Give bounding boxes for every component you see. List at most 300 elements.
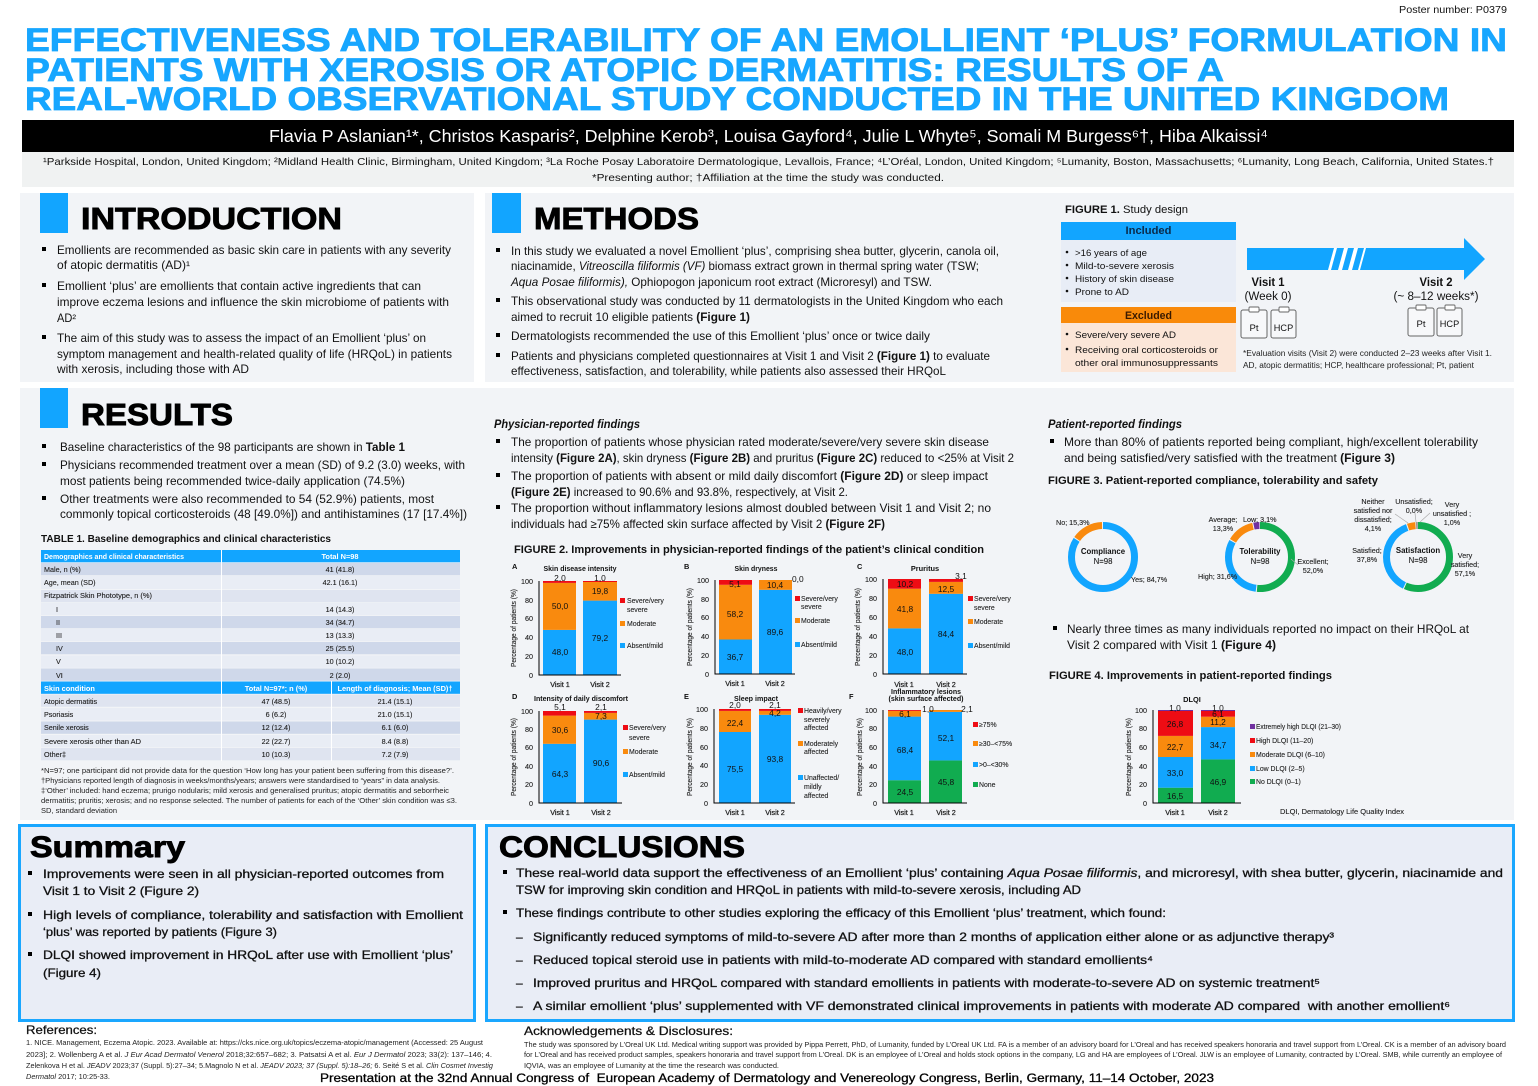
chart F: inflammatory lesions: 24,5 — [897, 787, 913, 797]
chart E: sleep impact: 2,1 — [769, 700, 781, 710]
chart F: inflammatory lesions: 40 — [869, 762, 877, 771]
icon: clipboard clinician visit 1 — [1271, 307, 1296, 338]
chart A: skin disease intensity: 20 — [525, 652, 533, 661]
icon: clipboard patient visit 1: Pt — [1249, 323, 1259, 334]
icon: clipboard patient visit 2: Pt — [1416, 319, 1426, 330]
title: REAL-WORLD OBSERVATIONAL STUDY CONDUCTED IN THE UNITED KINGDOM — [25, 81, 1449, 117]
donut: satisfaction: Very — [1458, 551, 1473, 560]
text block: conclusions bullets: Improved pruritus and HRQoL compared with standard emollients in patients with moderate-to-severe AD on systemic treatment⁵ — [533, 976, 1320, 990]
chart D: intensity of daily discomfort: Visit 2 — [591, 808, 611, 817]
chart A: skin disease intensity: Severe/very — [627, 598, 664, 605]
donut: tolerability: N=98 — [1251, 557, 1269, 566]
table 1: baseline demographics: 21.0 (15.1) — [378, 710, 412, 719]
text block: introduction bullets: improve eczema lesions and influence the skin microbiome of patients with — [57, 296, 449, 309]
table 1: baseline demographics: 25 (25.5) — [326, 644, 354, 653]
donut: satisfaction: Unsatisfied; — [1395, 497, 1433, 506]
panel: summary — [20, 826, 474, 1020]
table 1: baseline demographics: Severe xerosis other than AD — [44, 737, 141, 746]
chart: DLQI: 33,0 — [1167, 768, 1183, 778]
chart: DLQI: 20 — [1139, 780, 1147, 789]
text block: HRQoL bullet — [1053, 623, 1470, 652]
table 1: baseline demographics: Skin condition — [44, 684, 95, 693]
chart C: pruritus: Moderate — [974, 619, 1003, 626]
donut: tolerability: Average; — [1209, 515, 1237, 524]
donut: satisfaction: satisfied nor — [1354, 506, 1393, 515]
references: References: — [26, 1024, 97, 1037]
arrow: timeline — [1247, 238, 1485, 280]
table 1: baseline demographics: Age, mean (SD) — [44, 578, 96, 587]
table 1: baseline demographics: 12 (12.4) — [262, 723, 290, 732]
chart A: skin disease intensity — [509, 562, 664, 689]
chart A: skin disease intensity: A — [512, 562, 518, 571]
donut: satisfaction: 57,1% — [1455, 569, 1476, 578]
presentation line: Presentation at the 32nd Annual Congress of European Academy of Dermatology and Venereology Congress, Berlin, Germany, 11–14 October, 2023 — [320, 1071, 1214, 1085]
text block: physician-reported bullets: The proportion of patients with absent or mild daily discomfort (Figure 2D) or sleep impact — [511, 470, 989, 483]
chart A: skin disease intensity: Percentage of patients (%) — [509, 589, 518, 667]
visit 2 label: (~ 8–12 weeks*) — [1394, 291, 1479, 303]
excluded criteria box: Receiving oral corticosteroids or — [1075, 344, 1218, 355]
text block: HRQoL bullet: Visit 2 compared with Visit 1 (Figure 4) — [1067, 639, 1276, 652]
text block: baseline bullets — [42, 441, 467, 521]
chart E: sleep impact: E — [684, 692, 689, 701]
donut: tolerability — [1198, 515, 1329, 588]
text block: physician-reported bullets: The proportion without inflammatory lesions almost doubled between Visit 1 and Visit 2; no — [511, 502, 991, 515]
table 1: baseline demographics: 22 (22.7) — [262, 737, 290, 746]
table 1 footnote: SD, standard deviation — [41, 806, 117, 815]
table 1 footnote: dermatitis; pruritis; xerosis; and no response selected. The number of patients for each of the ‘Other’ skin condition was ≤3. — [41, 796, 457, 805]
chart B: skin dryness: Severe/very — [801, 596, 838, 603]
heading: patient-reported findings: Patient-reported findings — [1048, 418, 1183, 431]
chart C: pruritus: 84,4 — [938, 629, 954, 639]
chart C: pruritus: 60 — [869, 613, 877, 622]
acknowledgements and disclosures — [524, 1025, 1506, 1070]
text block: methods bullets — [496, 245, 1003, 378]
chart A: skin disease intensity: 48,0 — [552, 647, 568, 657]
text block: HRQoL bullet: Nearly three times as many individuals reported no impact on their HRQoL at — [1067, 623, 1470, 636]
chart F: inflammatory lesions: Inflammatory lesions — [891, 687, 961, 696]
affiliations: ¹Parkside Hospital, London, United Kingdom; ²Midland Health Clinic, Birmingham, United Kingdom; ³La Roche Posay Laboratoire Dermatologique, Levallois, France; ⁴L’Oréal, London, United Kingdom; ⁵Lumanity, Boston, Massachusetts; ⁶Lumanity, Long Beach, California, United States.† — [43, 157, 1494, 168]
text block: conclusions bullets: – — [516, 953, 523, 967]
chart C: pruritus: Percentage of patients (%) — [853, 588, 862, 666]
chart B: skin dryness: 40 — [701, 632, 709, 641]
chart F: inflammatory lesions: 1,0 — [922, 704, 934, 714]
included criteria box: >16 years of age — [1075, 247, 1147, 258]
donut: satisfaction: N=98 — [1409, 556, 1427, 565]
text block: introduction bullets: with xerosis, including those with AD — [56, 363, 249, 376]
chart B: skin dryness: Visit 1 — [725, 679, 745, 688]
chart: DLQI: Low DLQI (2–5) — [1256, 766, 1305, 773]
table 1 footnote: *N=97; one participant did not provide data for the question ‘How long has your patient been suffering from this disease?’. — [41, 766, 454, 775]
chart: DLQI: DLQI, Dermatology Life Quality Index — [1280, 809, 1405, 816]
table 1: baseline demographics: 13 (13.3) — [326, 631, 354, 640]
figure 1: study design — [1061, 204, 1492, 372]
author bar: Flavia P Aslanian¹*, Christos Kasparis², Delphine Kerob³, Louisa Gayford⁴, Julie L Whyte⁵, Somali M Burgess⁶†, Hiba Alkaissi⁴ — [269, 126, 1268, 146]
table 1 footnote — [41, 766, 457, 815]
table 1: baseline demographics: Total N=98 — [321, 552, 359, 561]
text block: methods bullets: Patients and physicians completed questionnaires at Visit 1 and Visit 2 (Figure 1) to evaluate — [511, 350, 990, 363]
heading: summary: Summary — [30, 831, 185, 864]
chart C: pruritus: 3,1 — [955, 571, 967, 581]
chart: DLQI: 60 — [1139, 743, 1147, 752]
donut: compliance: Yes; 84,7% — [1131, 575, 1168, 584]
icon: clipboard patient visit 1 — [1241, 307, 1267, 338]
chart E: sleep impact: 20 — [700, 780, 708, 789]
chart: DLQI: Visit 2 — [1208, 808, 1228, 817]
text block: conclusions bullets: These real-world data support the effectiveness of an Emollient ‘plus’ containing Aqua Posae filiformis , and microresyl, with shea butter, glycerin, niacinamide and — [516, 866, 1503, 880]
table 1: baseline demographics: 41 (41.8) — [326, 565, 354, 574]
table 1: baseline demographics: Senile xerosis — [44, 723, 89, 732]
chart B: skin dryness: Percentage of patients (%) — [685, 588, 694, 666]
panel: introduction — [20, 193, 474, 382]
donut: tolerability: 52,0% — [1303, 566, 1324, 575]
heading: introduction: INTRODUCTION — [81, 201, 342, 236]
chart D: intensity of daily discomfort: 5,1 — [554, 702, 566, 712]
text block: conclusions bullets: Reduced topical steroid use in patients with mild-to-moderate AD compared with standard emollients⁴ — [533, 953, 1153, 967]
acknowledgements and disclosures: Acknowledgements & Disclosures: — [524, 1025, 733, 1038]
table 1: baseline demographics: VI — [56, 671, 63, 680]
chart E: sleep impact: mildly — [804, 784, 822, 791]
chart E: sleep impact — [684, 692, 842, 817]
chart D: intensity of daily discomfort: 90,6 — [593, 758, 609, 768]
chart D: intensity of daily discomfort: 80 — [525, 725, 533, 734]
chart: DLQI: 1,0 — [1212, 703, 1224, 713]
chart C: pruritus: Absent/mild — [974, 643, 1010, 650]
chart A: skin disease intensity: 1,0 — [594, 573, 606, 583]
figure 3 title: FIGURE 3. Patient-reported compliance, tolerability and safety — [1048, 475, 1379, 487]
text block: physician-reported bullets: The proportion of patients whose physician rated moderate/severe/very severe skin disease — [511, 436, 989, 449]
chart D: intensity of daily discomfort: Moderate — [629, 749, 658, 756]
chart B: skin dryness: 0,0 — [792, 574, 804, 584]
text block: methods bullets: This observational study was conducted by 11 dermatologists in the United Kingdom who each — [511, 295, 1003, 308]
acknowledgements and disclosures: for L’Oreal and has received product samples, speakers honoraria and travel support from L’Oreal. DK is an employee of L’Oreal and holds stock options in the company, LG and HA are employees of L’Oreal. JLW is an employee of Lumanity, contracted by L’Oreal. SMB, while currently an employee of — [524, 1052, 1502, 1059]
affiliations — [22, 152, 1514, 187]
chart B: skin dryness: 20 — [701, 651, 709, 660]
table 1: baseline demographics: 14 (14.3) — [326, 605, 354, 614]
chart C: pruritus — [853, 562, 1011, 689]
chart F: inflammatory lesions: 2,1 — [961, 704, 973, 714]
chart E: sleep impact: Percentage of patients (%) — [685, 718, 694, 796]
figure 1 footnote — [1243, 349, 1492, 370]
chart D: intensity of daily discomfort: Intensity of daily discomfort — [534, 694, 629, 703]
donut: satisfaction: 1,0% — [1444, 518, 1461, 527]
chart C: pruritus: 40 — [869, 632, 877, 641]
excluded criteria box: other oral immunosuppressants — [1075, 357, 1218, 368]
text block: introduction bullets: symptom management and health-related quality of life (HRQoL) in patients — [57, 348, 452, 361]
heading: conclusions: CONCLUSIONS — [499, 831, 745, 864]
author bar — [22, 120, 1514, 152]
text block: physician-reported bullets: individuals had ≥75% affected skin surface affected by Visit 2 (Figure 2F) — [511, 518, 885, 531]
chart C: pruritus: severe — [974, 605, 995, 612]
chart F: inflammatory lesions — [849, 687, 1012, 817]
chart E: sleep impact: Visit 2 — [765, 808, 785, 817]
affiliations: *Presenting author; †Affiliation at the time the study was conducted. — [592, 173, 944, 184]
heading: methods: METHODS — [534, 201, 699, 236]
table 1: baseline demographics: 42.1 (16.1) — [323, 578, 357, 587]
chart A: skin disease intensity: 80 — [525, 596, 533, 605]
table 1: baseline demographics: I — [56, 605, 58, 614]
text block: baseline bullets: Baseline characteristics of the 98 participants are shown in Table 1 — [60, 441, 406, 454]
text block: physician-reported bullets: (Figure 2E) increased to 90.6% and 93.8%, respectively, at Visit 2. — [511, 486, 848, 499]
included criteria box: Prone to AD — [1075, 286, 1129, 297]
chart D: intensity of daily discomfort: Percentage of patients (%) — [509, 718, 518, 796]
donut: compliance: No; 15,3% — [1056, 518, 1090, 527]
chart E: sleep impact: 40 — [700, 761, 708, 770]
chart: DLQI: 46,9 — [1210, 777, 1226, 787]
donut: satisfaction: Neither — [1361, 497, 1385, 506]
chart D: intensity of daily discomfort: 40 — [525, 762, 533, 771]
chart E: sleep impact: Heavily/very — [804, 708, 842, 715]
table 1: baseline demographics: 10 (10.2) — [326, 657, 354, 666]
chart: DLQI: DLQI — [1183, 695, 1201, 704]
table 1 footnote: ‡‘Other’ included: hand eczema; prurigo nodularis; mild xerosis and generalised pruritus; atopic dermatitis and seborrheic — [41, 786, 449, 795]
text block: summary bullets: DLQI showed improvement in HRQoL after use with Emollient ‘plus’ — [43, 948, 453, 962]
donut: satisfaction: Satisfaction — [1396, 546, 1440, 555]
chart C: pruritus: Visit 2 — [936, 680, 956, 689]
chart: DLQI: 16,5 — [1167, 791, 1183, 801]
references — [26, 1024, 494, 1081]
chart: DLQI: 80 — [1139, 724, 1147, 733]
chart B: skin dryness: 36,7 — [727, 652, 743, 662]
chart B: skin dryness: B — [684, 562, 689, 571]
acknowledgements and disclosures: The study was sponsored by L’Oreal UK Ltd. Medical writing support was provided by Pippa Perrett, PhD, of Lumanity, funded by L’Oreal UK Ltd. FA is a member of an advisory board for L’Oreal and has received speakers honoraria and travel support from L’Oreal. CK is a member of an advisory board — [524, 1042, 1506, 1049]
chart E: sleep impact: Visit 1 — [725, 808, 745, 817]
visit 2 label: Visit 2 — [1420, 277, 1452, 289]
chart D: intensity of daily discomfort: 0 — [529, 799, 533, 808]
chart A: skin disease intensity: 0 — [529, 671, 533, 680]
chart F: inflammatory lesions: 52,1 — [938, 733, 954, 743]
heading: results: RESULTS — [81, 397, 233, 432]
chart D: intensity of daily discomfort: 7,3 — [595, 711, 607, 721]
chart A: skin disease intensity: Visit 2 — [590, 680, 610, 689]
panel: results — [20, 388, 1514, 820]
chart: DLQI: Visit 1 — [1165, 808, 1185, 817]
donut: satisfaction: Satisfied; — [1352, 546, 1382, 555]
excluded criteria box: Severe/very severe AD — [1075, 329, 1176, 340]
included criteria box — [1061, 222, 1236, 302]
panel: methods — [485, 193, 1514, 382]
title: PATIENTS WITH XEROSIS OR ATOPIC DERMATITIS: RESULTS OF A — [25, 52, 1224, 88]
chart F: inflammatory lesions: None — [979, 782, 996, 789]
chart: DLQI: 40 — [1139, 762, 1147, 771]
included criteria box: Included — [1126, 225, 1172, 237]
icon: clipboard clinician visit 1: HCP — [1274, 323, 1293, 333]
chart D: intensity of daily discomfort — [509, 692, 666, 817]
chart F: inflammatory lesions: ≥30–<75% — [979, 741, 1012, 748]
table 1: baseline demographics: 7.2 (7.9) — [382, 750, 408, 759]
included criteria box: Mild-to-severe xerosis — [1075, 260, 1174, 271]
title — [25, 22, 1507, 117]
chart D: intensity of daily discomfort: 2,1 — [595, 702, 607, 712]
donut: tolerability: Excellent; — [1297, 557, 1329, 566]
donut: tolerability: Tolerability — [1239, 547, 1281, 556]
panel: conclusions — [486, 826, 1514, 1020]
chart E: sleep impact: affected — [804, 793, 829, 800]
chart E: sleep impact: affected — [804, 749, 829, 756]
chart C: pruritus: 10,2 — [897, 579, 913, 589]
table 1: baseline demographics: 6 (6.2) — [266, 710, 286, 719]
text block: introduction bullets: The aim of this study was to assess the impact of an Emollient ‘plus’ on — [57, 332, 426, 345]
table 1: baseline demographics: Demographics and clinical characteristics — [44, 552, 184, 561]
text block: summary bullets: Visit 1 to Visit 2 (Figure 2) — [43, 884, 199, 898]
chart A: skin disease intensity: Visit 1 — [550, 680, 570, 689]
chart D: intensity of daily discomfort: Absent/mild — [629, 772, 665, 779]
text block: baseline bullets: most patients being recommended twice-daily application (74.5%) — [60, 475, 405, 488]
text block: methods bullets: niacinamide, Vitreoscilla filiformis (VF) biomass extract grown in thermal spring water (TSW; — [511, 260, 979, 273]
chart C: pruritus: C — [857, 562, 863, 571]
visit 1 label: (Week 0) — [1244, 291, 1292, 303]
chart A: skin disease intensity: 2,0 — [554, 573, 566, 583]
chart D: intensity of daily discomfort: 60 — [525, 743, 533, 752]
text block: introduction bullets: Emollient ‘plus’ are emollients that contain active ingredients that can — [57, 280, 421, 293]
chart D: intensity of daily discomfort: 64,3 — [552, 769, 568, 779]
chart D: intensity of daily discomfort: severe — [629, 735, 650, 742]
chart B: skin dryness: Absent/mild — [801, 642, 837, 649]
chart: DLQI: Percentage of patients (%) — [1124, 718, 1133, 796]
chart A: skin disease intensity: 50,0 — [552, 601, 568, 611]
chart B: skin dryness — [684, 562, 838, 688]
chart F: inflammatory lesions: >0–<30% — [979, 762, 1009, 769]
chart F: inflammatory lesions: 6,1 — [899, 709, 911, 719]
chart A: skin disease intensity: 19,8 — [592, 586, 608, 596]
figure 1 footnote: AD, atopic dermatitis; HCP, healthcare professional; Pt, patient — [1243, 361, 1475, 370]
chart: DLQI — [1124, 695, 1405, 817]
text block: summary bullets — [28, 867, 464, 980]
references: 1. NICE. Management, Eczema Atopic. 2023. Available at: https://cks.nice.org.uk/topics/eczema-atopic/management (Accessed: 25 August — [26, 1038, 483, 1047]
text block: conclusions bullets — [503, 866, 1503, 1013]
chart A: skin disease intensity: Absent/mild — [627, 643, 663, 650]
chart C: pruritus: Severe/very — [974, 596, 1011, 603]
chart: DLQI: 26,8 — [1167, 719, 1183, 729]
donut: satisfaction: 37,8% — [1357, 555, 1378, 564]
icon: clipboard patient visit 2 — [1408, 305, 1434, 336]
chart F: inflammatory lesions: 68,4 — [897, 745, 913, 755]
chart F: inflammatory lesions: (skin surface affected) — [888, 694, 964, 703]
table 1: baseline demographics: V — [56, 657, 61, 666]
chart E: sleep impact: 0 — [704, 799, 708, 808]
text block: methods bullets: In this study we evaluated a novel Emollient ‘plus’, comprising shea butter, glycerin, canola oil, — [511, 245, 999, 258]
table 1: baseline demographics: Male, n (%) — [44, 565, 81, 574]
chart C: pruritus: 41,8 — [897, 604, 913, 614]
chart: DLQI: 6,1 — [1212, 709, 1224, 719]
visit 1 label — [1244, 277, 1292, 303]
chart: DLQI: 0 — [1143, 799, 1147, 808]
references: Zelenkova H et al. JEADV 2023;37 (Suppl. 5):27–34; 5.Magnolo N et al. JEADV 2023; 37 (Suppl. 5):18–26; 6. Seité S et al. Clin Cosmet Investig — [26, 1061, 494, 1070]
excluded criteria box — [1061, 307, 1236, 372]
table 1: baseline demographics: Total N=97*; n (%) — [245, 684, 308, 693]
included criteria box: History of skin disease — [1075, 273, 1174, 284]
table 1: baseline demographics: Fitzpatrick Skin Phototype, n (%) — [44, 591, 152, 600]
table 1: baseline demographics: Length of diagnosis; Mean (SD)† — [338, 684, 452, 693]
chart F: inflammatory lesions: 60 — [869, 743, 877, 752]
chart: DLQI: High DLQI (11–20) — [1256, 738, 1313, 745]
table 1: baseline demographics: Psoriasis — [44, 710, 74, 719]
acknowledgements and disclosures: IQVIA, was an employee of Lumanity at the time the research was conducted. — [524, 1063, 779, 1070]
text block: methods bullets: Dermatologists recommended the use of this Emollient ‘plus’ once or twice daily — [511, 330, 930, 343]
donut: tolerability: Low; 3,1% — [1243, 515, 1277, 524]
chart E: sleep impact: 100 — [696, 705, 708, 714]
text block: conclusions bullets: TSW for improving skin condition and HRQoL in patients with mild-to-severe xerosis, including AD — [516, 883, 1081, 897]
chart F: inflammatory lesions: 45,8 — [938, 777, 954, 787]
donut: satisfaction: 4,1% — [1365, 524, 1382, 533]
text block: conclusions bullets: Significantly reduced symptoms of mild-to-severe AD after more than 2 months of application either alone or as adjunctive therapy³ — [533, 930, 1334, 944]
text block: summary bullets: High levels of compliance, tolerability and satisfaction with Emollient — [43, 908, 464, 922]
chart E: sleep impact: severely — [804, 717, 830, 724]
chart: DLQI: 1,0 — [1169, 703, 1181, 713]
chart E: sleep impact: 22,4 — [727, 718, 743, 728]
chart: DLQI: Moderate DLQI (6–10) — [1256, 752, 1325, 759]
donut: satisfaction: Very — [1445, 500, 1460, 509]
text block: methods bullets: effectiveness, satisfaction, and tolerability, while patients also assessed their HRQoL — [511, 365, 947, 378]
table 1: baseline demographics: IV — [56, 644, 63, 653]
chart B: skin dryness: 89,6 — [767, 627, 783, 637]
visit 2 label — [1394, 277, 1479, 303]
table 1: baseline demographics: 34 (34.7) — [326, 618, 354, 627]
chart: DLQI: 11,2 — [1210, 717, 1226, 727]
chart F: inflammatory lesions: Visit 2 — [936, 808, 956, 817]
chart E: sleep impact: 60 — [700, 743, 708, 752]
chart B: skin dryness: 80 — [701, 595, 709, 604]
figure 1 footnote: *Evaluation visits (Visit 2) were conducted 2–23 weeks after Visit 1. — [1243, 349, 1492, 358]
chart B: skin dryness: Skin dryness — [734, 564, 778, 573]
text block: physician-reported bullets — [496, 436, 1014, 531]
table 1: baseline demographics: Atopic dermatitis — [44, 697, 98, 706]
chart C: pruritus: 100 — [865, 575, 877, 584]
table 1: baseline demographics: Other‡ — [44, 750, 66, 759]
chart E: sleep impact: 75,5 — [727, 764, 743, 774]
text block: baseline bullets: Physicians recommended treatment over a mean (SD) of 9.2 (3.0) weeks, with — [60, 459, 465, 472]
chart B: skin dryness: Visit 2 — [765, 679, 785, 688]
references: Dermatol 2017; 10:25-33. — [26, 1072, 110, 1081]
chart E: sleep impact: affected — [804, 725, 829, 732]
table 1: baseline demographics: II — [56, 618, 60, 627]
icon: clipboard clinician visit 2 — [1437, 305, 1462, 336]
chart D: intensity of daily discomfort: 100 — [521, 707, 533, 716]
text block: baseline bullets: Other treatments were also recommended to 54 (52.9%) patients, most — [60, 493, 435, 506]
chart B: skin dryness: 10,4 — [767, 580, 783, 590]
chart C: pruritus: 48,0 — [897, 647, 913, 657]
table 1: baseline demographics — [41, 534, 460, 761]
chart: DLQI: 100 — [1135, 706, 1147, 715]
text block: summary bullets: ‘plus’ was reported by patients (Figure 3) — [43, 925, 277, 939]
chart A: skin disease intensity: 40 — [525, 633, 533, 642]
chart D: intensity of daily discomfort: D — [512, 692, 518, 701]
donut: satisfaction: 0,0% — [1406, 506, 1423, 515]
donut: satisfaction: dissatisfied; — [1354, 515, 1392, 524]
text block: introduction bullets: AD² — [57, 312, 76, 325]
text block: summary bullets: (Figure 4) — [43, 966, 101, 980]
chart E: sleep impact: 4,2 — [769, 708, 781, 718]
donut: satisfaction: satisfied; — [1451, 560, 1479, 569]
chart E: sleep impact: 2,0 — [729, 700, 741, 710]
donut: compliance — [1056, 518, 1168, 588]
text block: conclusions bullets: These findings contribute to other studies exploring the efficacy of this Emollient ‘plus’ treatment, which found: — [516, 906, 1166, 920]
excluded criteria box: Excluded — [1125, 310, 1172, 322]
text block: patient-reported bullets: More than 80% of patients reported being compliant, high/excellent tolerability — [1064, 436, 1478, 449]
text block: conclusions bullets: – — [516, 930, 523, 944]
chart A: skin disease intensity: Moderate — [627, 621, 656, 628]
chart C: pruritus: 0 — [873, 670, 877, 679]
chart C: pruritus: Pruritus — [911, 564, 939, 573]
figure 1: study design: FIGURE 1. Study design — [1065, 204, 1188, 216]
chart B: skin dryness: Moderate — [801, 618, 830, 625]
table 1: baseline demographics: 2 (2.0) — [330, 671, 350, 680]
chart A: skin disease intensity: severe — [627, 607, 648, 614]
text block: physician-reported bullets: intensity (Figure 2A), skin dryness (Figure 2B) and pruritus (Figure 2C) reduced to <25% at Visit 2 — [511, 452, 1014, 465]
title: EFFECTIVENESS AND TOLERABILITY OF AN EMOLLIENT ‘PLUS’ FORMULATION IN — [25, 22, 1507, 58]
donut: tolerability: 13,3% — [1213, 524, 1234, 533]
donut: tolerability: High; 31,6% — [1198, 572, 1238, 581]
donut: compliance: Compliance — [1081, 547, 1126, 556]
